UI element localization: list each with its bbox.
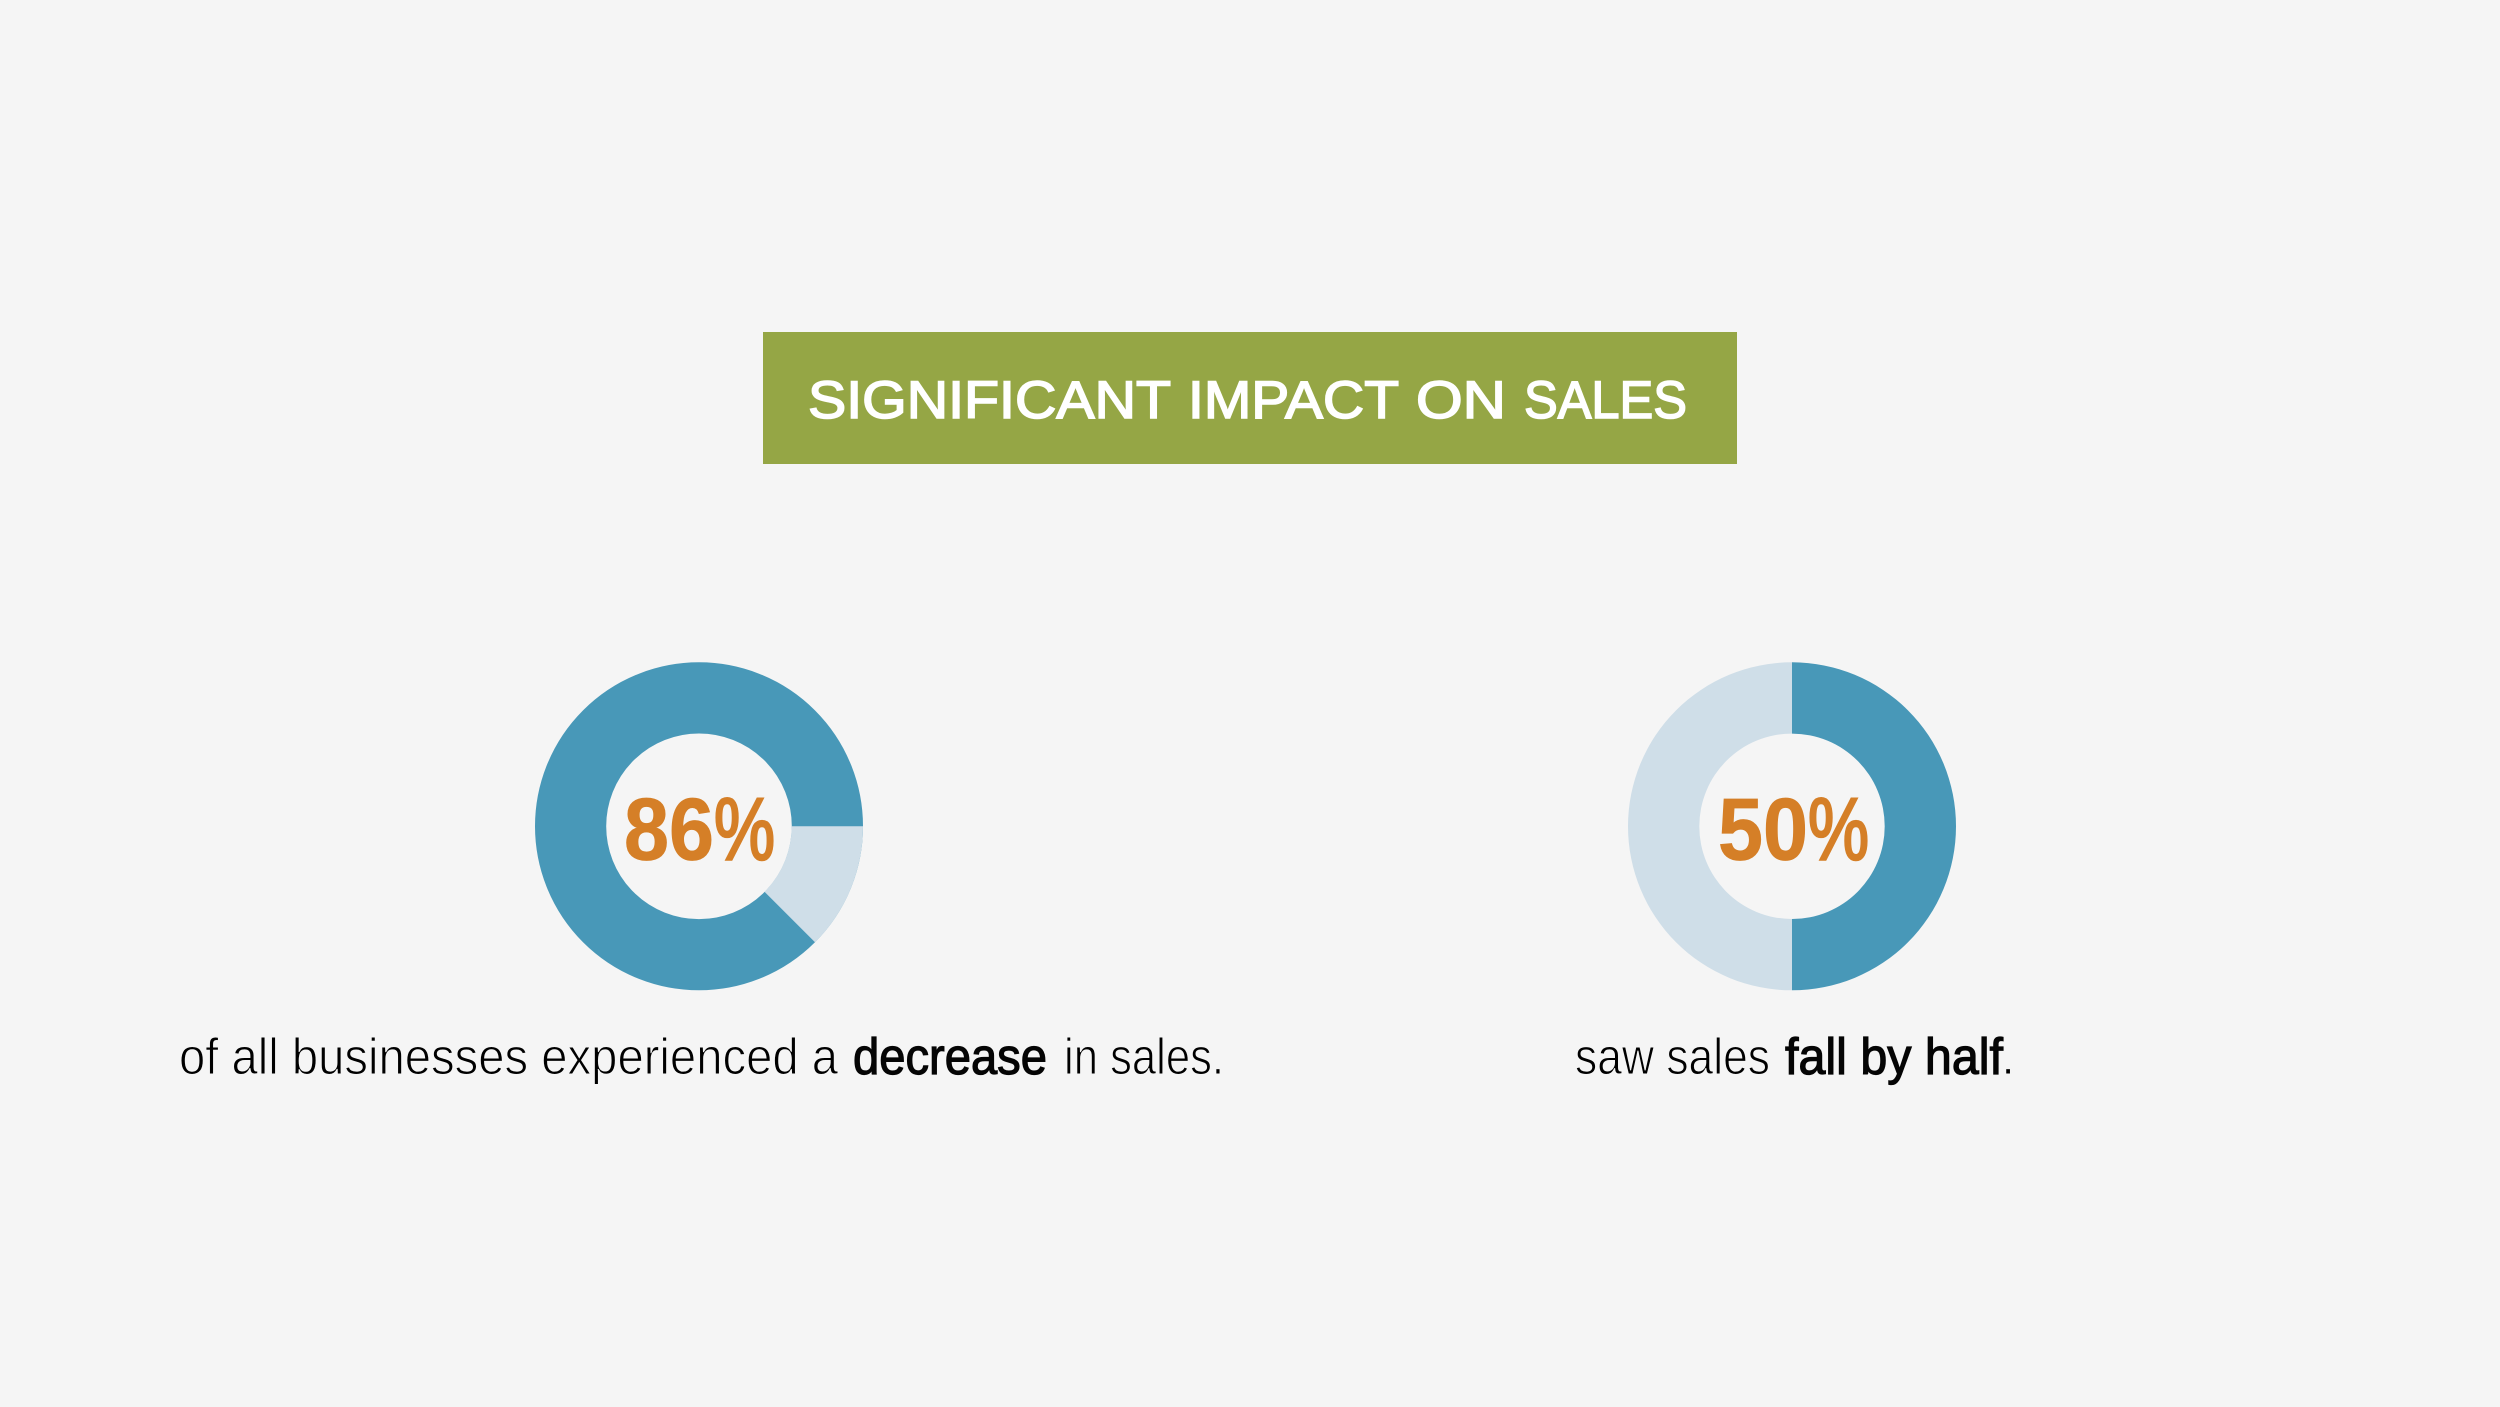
donut chart: 50% <box>1628 662 1956 990</box>
value: 50%: % <box>1808 780 1869 878</box>
title text <box>808 371 1687 430</box>
caption: fall by half: . <box>2001 1028 2015 1085</box>
value: 86%: % <box>714 780 775 878</box>
title text: IMPACT <box>1188 371 1399 430</box>
caption: fall by half: saw sales <box>1575 1028 1770 1085</box>
value: 50%: 50 <box>1718 780 1808 878</box>
value: 86% <box>624 780 775 878</box>
caption: decrease in sales: decrease <box>853 1028 1047 1085</box>
title text: ON <box>1416 371 1506 430</box>
caption: decrease in sales <box>179 1028 1224 1085</box>
caption: fall by half <box>1575 1028 2015 1085</box>
caption: fall by half: fall by half <box>1785 1028 2004 1085</box>
panel: 86 percent statistic <box>179 698 1224 1085</box>
value: 50% <box>1718 780 1869 878</box>
caption: decrease in sales: in sales. <box>1064 1028 1224 1085</box>
value: 86%: 86 <box>624 780 714 878</box>
panel: 50 percent statistic <box>1575 662 2015 1085</box>
title banner <box>763 332 1737 464</box>
title text: SALES <box>1524 371 1687 430</box>
caption: decrease in sales: of all businesses experienced a <box>179 1028 839 1085</box>
title text: SIGNIFICANT <box>808 371 1171 430</box>
donut chart: 86% <box>571 698 863 955</box>
